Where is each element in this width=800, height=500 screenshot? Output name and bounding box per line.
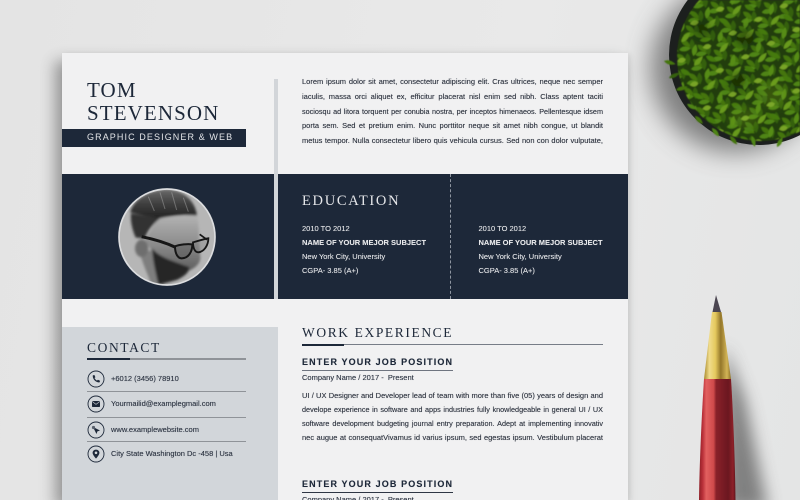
job title bar	[62, 129, 246, 147]
glasses	[142, 234, 208, 258]
education entry one	[302, 224, 426, 275]
job one company: Company Name / 2017 - Present	[302, 373, 414, 382]
plant shadow	[651, 0, 800, 152]
panel: education	[278, 174, 628, 299]
job title bar: GRAPHIC DESIGNER & WEB	[87, 132, 233, 142]
education entry two: 2010 TO 2012	[478, 224, 526, 233]
pen gold nib	[704, 312, 731, 379]
icon: phone	[88, 370, 104, 388]
education entry two: CGPA- 3.85 (A+)	[478, 266, 535, 275]
icon: website cursor	[88, 422, 104, 438]
education entry one: New York City, University	[302, 252, 385, 261]
face	[145, 214, 200, 271]
education entry one: 2010 TO 2012	[302, 224, 350, 233]
neck	[140, 250, 163, 284]
foliage edge leaves	[663, 59, 800, 148]
contact phone text: +6012 (3456) 78910	[111, 374, 179, 383]
education entry one: CGPA- 3.85 (A+)	[302, 266, 358, 275]
job one description: software development budgeting journal entry preparation. Adept at implementing innovativ	[302, 419, 603, 428]
contact email text: Yourmailid@examplegmail.com	[111, 399, 216, 408]
job one heading: ENTER YOUR JOB POSITION	[302, 357, 453, 367]
icon: location pin	[88, 446, 104, 462]
pot rim	[669, 0, 800, 145]
pen	[699, 295, 736, 500]
pen shadow	[724, 345, 768, 500]
contact heading: CONTACT	[87, 340, 161, 355]
name heading: TOM	[87, 78, 137, 102]
icon: mail	[88, 396, 104, 412]
shaved side of head	[131, 213, 160, 238]
intro paragraph: porta sem. Sed et pretium enim. Nunc porttitor neque sit amet nibh congue, ut blandit	[302, 121, 603, 130]
contact address text: City State Washington Dc -458 | Usa	[111, 449, 233, 458]
intro paragraph: metus tempor. Nulla consectetur libero quis vehicula cursus. Sed non con dolor vulputate,	[302, 136, 603, 145]
divider column	[274, 79, 278, 299]
hair	[130, 190, 197, 218]
education heading: EDUCATION	[302, 193, 400, 209]
education entry two: New York City, University	[478, 252, 562, 261]
education entry one: NAME OF YOUR MEJOR SUBJECT	[302, 238, 426, 247]
panel: contact	[62, 327, 278, 500]
intro paragraph: iaculis, massa orci aliquet ex, efficitur placerat nisl enim sed nibh. Class aptent taciti	[302, 92, 603, 101]
photo band	[62, 174, 274, 299]
foliage light and dark patches	[736, 31, 754, 45]
job one description	[302, 391, 603, 442]
name heading: STEVENSON	[87, 100, 219, 124]
job one description: UI / UX Designer and Developer lead of team with more than five (05) years of design and	[302, 391, 603, 400]
job two heading: ENTER YOUR JOB POSITION	[302, 479, 453, 489]
job one description: nec augue at consequatVivamus id varius ipsum, sed egestas ipsum. Vestibulum placerat	[302, 433, 603, 442]
ear	[135, 240, 148, 257]
pen red barrel	[699, 379, 736, 500]
name heading	[87, 78, 219, 124]
intro paragraph: Lorem ipsum dolor sit amet, consectetur adipiscing elit. Cras ultrices, neque nec semper	[302, 77, 603, 86]
intro paragraph	[302, 77, 603, 145]
intro paragraph: sociosqu ad litora torquent per conubia nostra, per inceptos himenaeos. Pellentesque idsem	[302, 107, 603, 116]
dashed divider	[450, 174, 451, 299]
foliage	[663, 0, 800, 148]
education entry two: NAME OF YOUR MEJOR SUBJECT	[478, 238, 603, 247]
hair streaks	[148, 192, 188, 212]
plant pot from above	[634, 0, 800, 500]
job one description: develope experience in software and apps industries fully knowledgeable in general UI / UX	[302, 405, 603, 414]
work experience heading: WORK EXPERIENCE	[302, 325, 453, 340]
beard	[152, 248, 189, 285]
portrait photo	[118, 188, 216, 286]
resume sheet	[62, 53, 628, 500]
contact website text: www.examplewebsite.com	[111, 425, 199, 434]
education entry two	[478, 224, 603, 275]
